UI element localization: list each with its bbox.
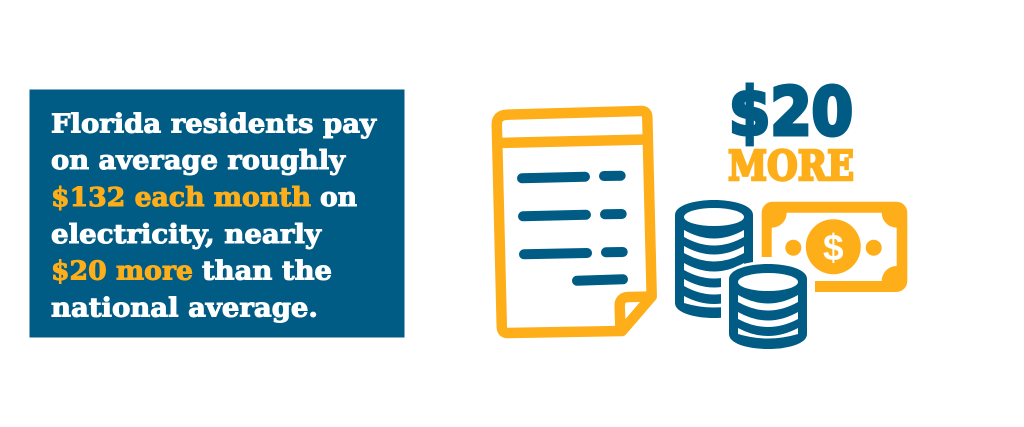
text block: callout statement: Florida residents pay [51,108,378,140]
icon: back coin stack [675,200,761,322]
text block: callout statement: on average roughly [51,145,347,176]
icon: dollar bill [755,202,907,295]
heading: $20: $20 [729,74,853,150]
text block: callout statement: $132 each month [51,182,311,213]
text block: callout statement: electricity, nearly [51,219,323,250]
text block: callout statement [51,108,378,324]
text block: callout statement: national average. [51,292,318,324]
text block: callout statement: $20 more [51,256,193,286]
heading: MORE: MORE [728,142,854,190]
icon: bill document [497,111,652,333]
text block: callout statement: than the [202,256,332,286]
bill line items [522,176,623,281]
icon: dollar bill: $ [823,227,844,268]
text block: callout statement: on [320,182,357,213]
icon: front coin stack [729,264,807,349]
panel: text callout [30,90,404,338]
